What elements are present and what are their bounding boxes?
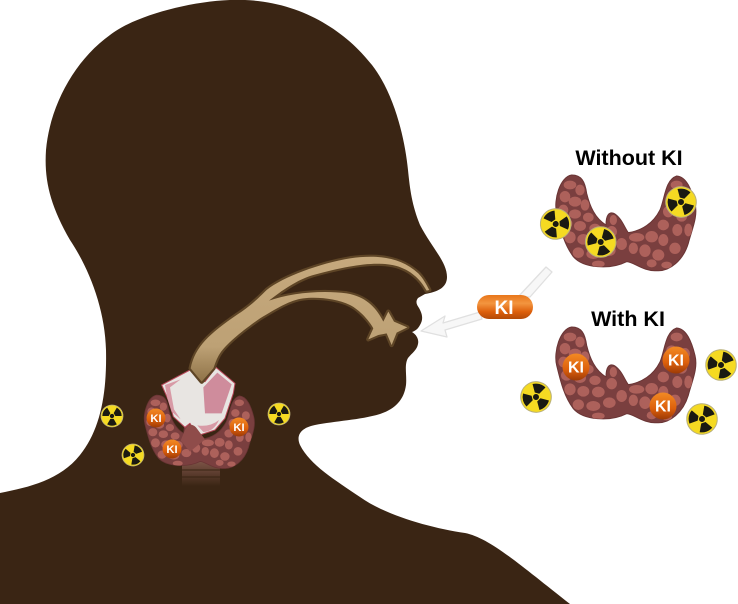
thyroid cartilage bbox=[162, 367, 235, 452]
heading: with KI: With KI bbox=[591, 307, 665, 331]
radiation symbols outside protected thyroid bbox=[517, 343, 738, 441]
heading: without KI: Without KI bbox=[575, 146, 683, 170]
thyroid without KI bbox=[539, 175, 700, 271]
main thyroid bbox=[144, 395, 254, 468]
thyroid with KI bbox=[556, 327, 696, 423]
KI pill: KI bbox=[494, 298, 514, 319]
trachea bbox=[182, 462, 220, 486]
KI pill bbox=[477, 295, 533, 319]
head silhouette bbox=[0, 0, 570, 604]
intake arrow bbox=[421, 267, 552, 337]
KI balls on main thyroid bbox=[147, 409, 248, 458]
radiation symbols around main thyroid bbox=[97, 399, 294, 471]
airway bbox=[191, 257, 429, 382]
